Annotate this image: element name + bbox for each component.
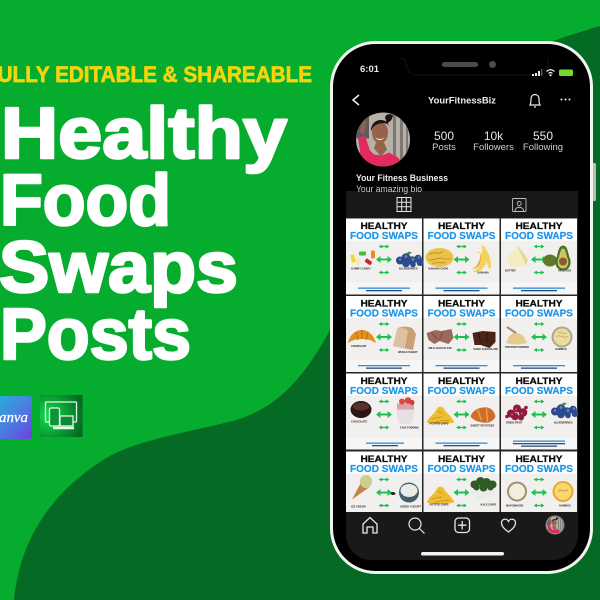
post: chocolate pudding to chia pudding: CHOCOLATE xyxy=(351,420,368,424)
title: Food xyxy=(0,161,171,241)
stats: 500 xyxy=(434,129,454,143)
post: mayonnaise to hummus: FOOD SWAPS xyxy=(505,463,573,475)
post: ice cream to greek yogurt: ICE CREAM xyxy=(351,504,366,508)
post: butter to avocado xyxy=(501,218,577,294)
phone notch xyxy=(400,58,550,75)
post: mayonnaise to hummus xyxy=(501,452,577,512)
tagged tab icon xyxy=(512,198,526,212)
post: chocolate pudding to chia pudding: FOOD SWAPS xyxy=(350,385,418,397)
phone body xyxy=(332,42,592,572)
title: Healthy xyxy=(1,94,287,174)
tab bar xyxy=(346,191,578,218)
title: Posts xyxy=(0,295,191,375)
post: ice cream to greek yogurt: FOOD SWAPS xyxy=(350,463,418,475)
nav: search xyxy=(409,518,424,534)
stats: Followers xyxy=(473,142,514,153)
profile bio: Your amazing bio xyxy=(356,184,422,194)
post: croissant to whole wheat bread: FOOD SWAPS xyxy=(350,308,418,320)
battery xyxy=(559,70,573,76)
post: dried fruit to blueberries: BLUEBERRIES xyxy=(554,420,573,424)
post: ice cream to greek yogurt: HEALTHY xyxy=(360,453,408,464)
post: gummy candy to blueberries: FOOD SWAPS xyxy=(350,230,418,242)
post: potato chips to kale xyxy=(424,452,500,512)
more dots xyxy=(560,98,570,100)
post: gummy candy to blueberries: BLUEBERRIES xyxy=(399,266,418,270)
post: mayonnaise to hummus: HEALTHY xyxy=(516,453,563,464)
title xyxy=(0,94,287,375)
post: protein powder to hummus xyxy=(501,296,577,372)
phone xyxy=(332,42,596,572)
speaker xyxy=(442,62,478,67)
camera xyxy=(489,61,496,68)
post: banana chips to banana: BANANA CHIPS xyxy=(428,266,449,270)
back chevron xyxy=(353,95,359,105)
post: butter to avocado: HEALTHY xyxy=(516,220,563,231)
profile name: Your Fitness Business xyxy=(356,173,448,183)
post: dried fruit to blueberries: HEALTHY xyxy=(516,375,563,386)
post: protein powder to hummus: FOOD SWAPS xyxy=(505,308,573,320)
post: gummy candy to blueberries: HEALTHY xyxy=(360,220,408,231)
bottom navigation bar xyxy=(346,512,578,560)
post: dried fruit to blueberries: FOOD SWAPS xyxy=(505,385,573,397)
post: banana chips to banana: HEALTHY xyxy=(438,220,486,231)
post: butter to avocado: AVOCADO xyxy=(558,268,571,272)
phone side buttons xyxy=(592,163,596,201)
post: milk chocolate to dark chocolate: HEALTHY xyxy=(438,297,486,308)
post: gummy candy to blueberries xyxy=(346,218,424,294)
post: milk chocolate to dark chocolate: FOOD SWAPS xyxy=(428,308,496,320)
post: chocolate pudding to chia pudding: CHIA PUDDING xyxy=(400,426,419,430)
post: mayonnaise to hummus: HUMMUS xyxy=(559,504,571,508)
post: mayonnaise to hummus: MAYONNAISE xyxy=(506,504,524,508)
post: ice cream to greek yogurt xyxy=(346,452,422,512)
post: banana chips to banana xyxy=(424,218,500,294)
wifi xyxy=(546,70,554,76)
stats: 10k xyxy=(484,129,504,143)
stats xyxy=(432,129,563,153)
post: potato chips to kale: HEALTHY xyxy=(438,453,486,464)
post: potato chips to sweet potatoes xyxy=(424,374,500,450)
post: croissant to whole wheat bread xyxy=(346,296,422,372)
username: YourFitnessBiz xyxy=(428,96,496,106)
post: gummy candy to blueberries: GUMMY CANDY xyxy=(351,266,371,270)
post: potato chips to kale: POTATO CHIPS xyxy=(430,502,449,506)
post: chocolate pudding to chia pudding: HEALTHY xyxy=(360,375,408,386)
post: potato chips to sweet potatoes: HEALTHY xyxy=(438,375,486,386)
stats: Posts xyxy=(432,142,456,153)
post: potato chips to kale: KALE CHIPS xyxy=(480,502,496,506)
post: banana chips to banana: FOOD SWAPS xyxy=(428,230,496,242)
icon: devices badge xyxy=(40,395,82,437)
post: protein powder to hummus: HUMMUS xyxy=(555,347,567,351)
post: croissant to whole wheat bread: WHOLE WHEAT xyxy=(398,350,418,354)
bell icon xyxy=(530,94,540,107)
signal xyxy=(532,69,542,76)
post: croissant to whole wheat bread: CROISSANT xyxy=(351,344,367,348)
post: butter to avocado: BUTTER xyxy=(505,268,516,272)
status time: 6:01 xyxy=(360,64,380,75)
post grid xyxy=(346,218,578,528)
grid tab icon xyxy=(397,198,411,212)
nav: home xyxy=(363,518,377,533)
post: dried fruit to blueberries xyxy=(501,374,578,450)
nav: profile avatar xyxy=(546,516,564,534)
stats: Following xyxy=(523,142,563,153)
title: Swaps xyxy=(0,228,238,308)
post: potato chips to sweet potatoes: SWEET POTATOES xyxy=(470,424,495,428)
nav: add post xyxy=(455,518,470,532)
post: banana chips to banana: BANANA xyxy=(478,270,489,274)
post: potato chips to sweet potatoes: POTATO CHIPS xyxy=(430,422,449,426)
icon: Canva badge xyxy=(0,396,32,439)
post: protein powder to hummus: PROTEIN POWDER xyxy=(505,345,529,349)
post: potato chips to kale: FOOD SWAPS xyxy=(428,463,496,475)
post: potato chips to sweet potatoes: FOOD SWAPS xyxy=(428,385,496,397)
post: croissant to whole wheat bread: HEALTHY xyxy=(360,297,408,308)
post: protein powder to hummus: HEALTHY xyxy=(516,297,563,308)
post: milk chocolate to dark chocolate: DARK CHOCOLATE xyxy=(474,347,498,351)
post: ice cream to greek yogurt: GREEK YOGURT xyxy=(400,504,421,508)
nav: heart xyxy=(502,519,516,532)
avatar xyxy=(356,112,410,168)
post: milk chocolate to dark chocolate xyxy=(424,296,500,372)
post: milk chocolate to dark chocolate: MILK CHOCOLATE xyxy=(428,346,452,350)
home indicator xyxy=(421,552,504,556)
post: butter to avocado: FOOD SWAPS xyxy=(505,230,573,242)
post: chocolate pudding to chia pudding xyxy=(346,374,422,450)
post: dried fruit to blueberries: DRIED FRUIT xyxy=(506,420,523,424)
stats: 550 xyxy=(533,129,553,143)
